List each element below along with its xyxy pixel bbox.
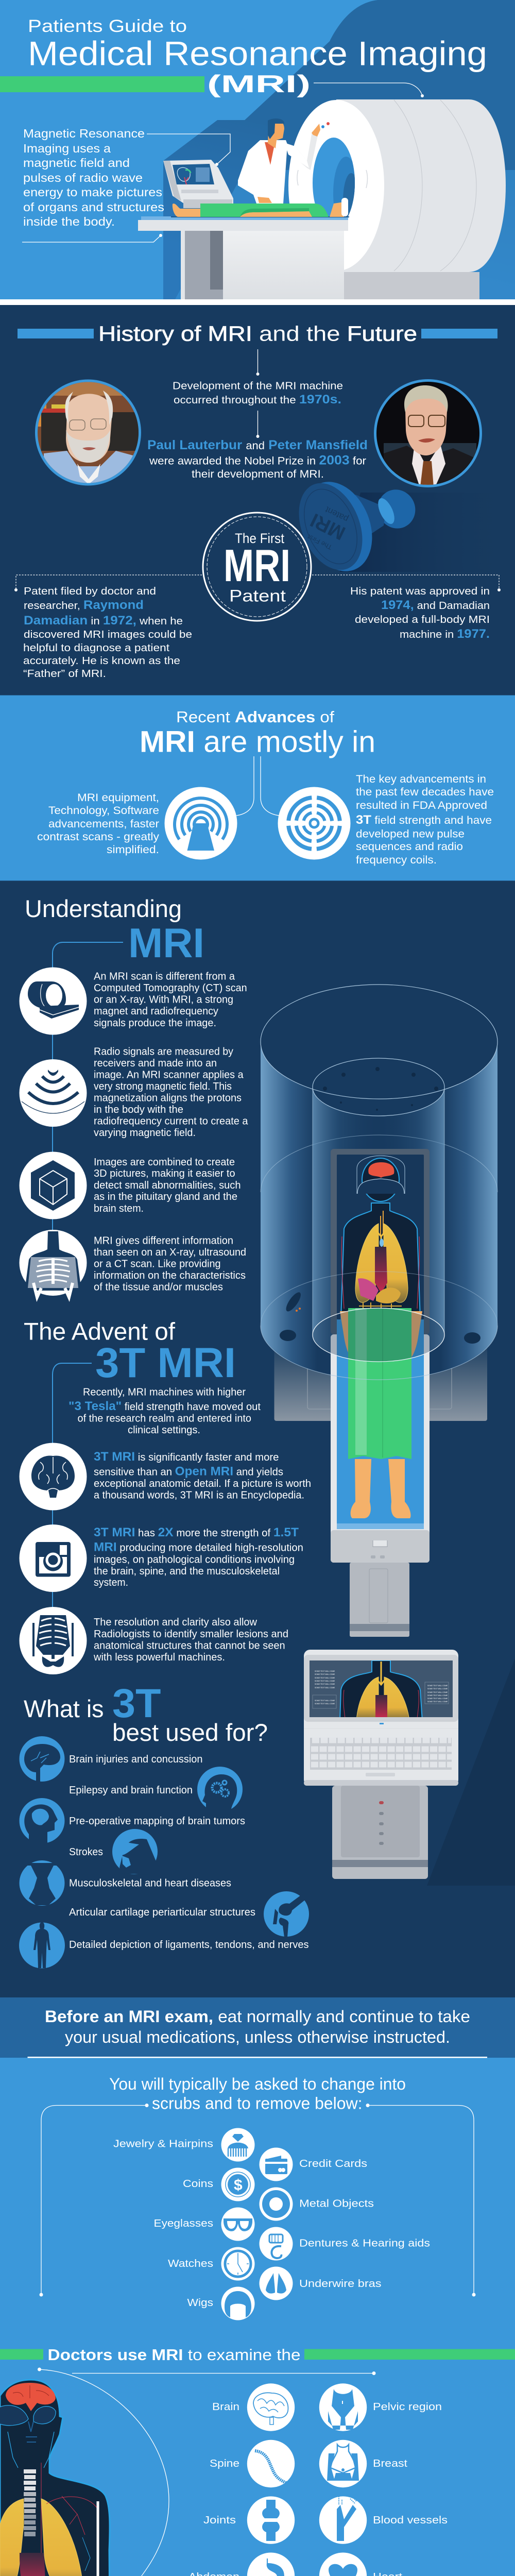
advances heading: MRI are mostly in xyxy=(140,725,375,758)
item: wigs xyxy=(187,2286,254,2320)
item: metal objects: Metal Objects xyxy=(299,2198,374,2209)
text: resolution xyxy=(93,1617,288,1663)
item: coins: Coins xyxy=(183,2178,213,2190)
understanding heading xyxy=(25,895,204,967)
text: radio signals: very strong magnetic field. This xyxy=(94,1081,232,1092)
item: jewelry and hairpins: Jewelry & Hairpins xyxy=(113,2139,213,2150)
patent filed text xyxy=(23,585,192,680)
text: 3T faster xyxy=(94,1450,311,1501)
list: strokes: Strokes xyxy=(69,1846,103,1858)
description text: of organs and structures xyxy=(23,200,164,214)
item: watches: Watches xyxy=(168,2258,213,2269)
list: brain tumors xyxy=(20,1798,245,1843)
scanner gantry base xyxy=(274,1340,487,1421)
body part: heart xyxy=(319,2552,403,2576)
panel: understanding MRI and 3T xyxy=(0,880,515,1997)
left advances text: MRI equipment, xyxy=(77,792,159,804)
text: different information: than seen on an X-ray, ultrasound xyxy=(94,1247,246,1258)
text: 3T faster: 3T MRI is significantly faster and more xyxy=(94,1450,279,1464)
text: 3D pictures xyxy=(94,1157,241,1214)
text: MRI differs from CT: An MRI scan is different from a xyxy=(94,971,235,982)
item: dentures and hearing aids xyxy=(260,2227,430,2261)
title: Medical Resonance Imaging xyxy=(28,34,487,72)
text: different information: information on the characteristics xyxy=(94,1270,246,1281)
connector arc and line xyxy=(38,2368,376,2576)
icon: MRI scanner xyxy=(20,968,87,1035)
title: Patients Guide to xyxy=(28,16,187,36)
icon: antenna xyxy=(165,787,237,859)
icon: brain xyxy=(20,1443,87,1511)
text: 3T strength: the brain, spine, and the musculoskeletal xyxy=(94,1566,280,1577)
text: resolution: anatomical structures that cannot be seen xyxy=(94,1640,285,1651)
patent dashed connectors xyxy=(14,575,501,591)
text: 3T faster: exceptional anatomic detail. If a picture is worth xyxy=(94,1478,311,1489)
callout line to console xyxy=(147,134,230,166)
illustration: MRI machine xyxy=(288,99,506,299)
photo: Paul Lauterbur xyxy=(35,379,141,487)
text: MRI differs from CT: signals produce the image. xyxy=(94,1018,216,1029)
patent approved text: developed a full-body MRI xyxy=(355,614,490,625)
nobel prize text: were awarded the Nobel Prize in 2003 for xyxy=(149,453,366,468)
body part: spine: Spine xyxy=(210,2458,239,2469)
patent filed text: Damadian in 1972, when he xyxy=(24,614,183,628)
illustration: doctor xyxy=(238,118,320,204)
patient table frame xyxy=(331,1149,430,1563)
list: musculoskeletal: Musculoskeletal and heart diseases xyxy=(69,1877,231,1889)
patent approved text: machine in 1977. xyxy=(400,627,490,641)
text: radio signals: receivers and made into an xyxy=(94,1058,217,1069)
before exam band xyxy=(0,1997,515,2058)
text: 3D pictures: brain stem. xyxy=(94,1203,144,1214)
human body anatomy xyxy=(0,2380,110,2576)
list: ligaments: Detailed depiction of ligaments, tendons, and nerves xyxy=(69,1939,309,1951)
what is 3T heading: best used for? xyxy=(112,1719,268,1746)
body part: abdomen xyxy=(188,2552,295,2576)
left advances text: simplified. xyxy=(107,844,159,856)
bracket frame xyxy=(39,2104,476,2297)
list: brain tumors: Pre-operative mapping of brain tumors xyxy=(69,1816,245,1827)
item: underwire bras: Underwire bras xyxy=(299,2278,381,2290)
description text: pulses of radio wave xyxy=(23,171,143,184)
list: strokes xyxy=(69,1829,158,1875)
change into scrubs text: scrubs and to remove below: xyxy=(152,2094,363,2113)
body part: breast xyxy=(319,2440,367,2487)
item: credit cards: Credit Cards xyxy=(299,2158,367,2170)
description text: inside the body. xyxy=(23,215,115,228)
other body parts labels right: Pelvic region xyxy=(373,2401,442,2413)
icon: target rings xyxy=(278,787,350,859)
text: radio signals: magnetization aligns the protons xyxy=(94,1093,242,1104)
body part: blood vessels xyxy=(319,2496,367,2544)
what is 3T heading: What is xyxy=(24,1695,104,1722)
item: coins xyxy=(183,2168,254,2201)
text: resolution: Radiologists to identify smaller lesions and xyxy=(94,1629,288,1640)
item: credit cards xyxy=(260,2147,367,2181)
stamp object: patent xyxy=(323,504,350,524)
nobel prize text: their development of MRI. xyxy=(192,468,324,480)
3T intro text: "3 Tesla" field strength have moved out xyxy=(68,1399,261,1413)
operator console: SOME TEXT WILL COME xyxy=(315,1683,335,1685)
doctors use MRI heading: Doctors use MRI to examine the xyxy=(47,2346,301,2364)
3T intro text: of the research realm and entered into xyxy=(77,1413,251,1425)
text: 3T strength: system. xyxy=(94,1577,128,1588)
operator console: SOME TEXT WILL COME xyxy=(315,1687,335,1689)
patent filed text: helpful to diagnose a patient xyxy=(23,642,169,654)
operator console: SOME TEXT WILL COME xyxy=(427,1701,448,1703)
description text: magnetic field and xyxy=(23,156,130,170)
timeline connector one xyxy=(256,349,260,376)
text: resolution: The resolution and clarity also allow xyxy=(94,1617,258,1628)
before exam text: your usual medications, unless otherwise instructed. xyxy=(65,2028,450,2046)
right advances text: sequences and radio xyxy=(356,841,463,853)
right advances text: 3T field strength and have xyxy=(356,813,492,827)
other body parts labels right: Blood vessels xyxy=(373,2515,448,2526)
operator console: SOME TEXT WILL COME xyxy=(315,1680,335,1682)
icon: 3D cube xyxy=(20,1152,87,1219)
white strip xyxy=(0,299,515,305)
right advances text: resulted in FDA Approved xyxy=(356,800,487,811)
text: 3T strength: MRI producing more detailed high-resolution xyxy=(94,1540,303,1554)
understanding heading: Understanding xyxy=(25,895,182,922)
stamp shadow xyxy=(340,493,515,572)
advent heading xyxy=(24,1318,236,1386)
list: musculoskeletal xyxy=(20,1860,231,1906)
text: MRI differs from CT: Computed Tomography (CT) scan xyxy=(94,982,247,994)
text: 3T strength: images, on pathological conditions involving xyxy=(94,1554,295,1566)
body part: spine xyxy=(210,2440,295,2487)
callout line to table xyxy=(22,234,162,242)
list: brain injuries xyxy=(20,1736,203,1782)
panel: before an MRI exam xyxy=(0,1997,515,2058)
advances background xyxy=(0,696,515,881)
body part: brain xyxy=(212,2383,295,2431)
patent filed text: discovered MRI images could be xyxy=(24,629,192,640)
divider xyxy=(28,2057,487,2058)
item: eyeglasses: Eyeglasses xyxy=(153,2218,213,2229)
patent filed text: Patent filed by doctor and xyxy=(24,585,156,597)
patent approved text xyxy=(350,585,490,641)
development text: Development of the MRI machine xyxy=(173,381,343,392)
stamp seal: The First xyxy=(235,531,284,546)
patent approved text: 1974, and Damadian xyxy=(381,598,490,612)
light panel background xyxy=(0,2058,515,2576)
panel: header xyxy=(0,0,515,305)
change into scrubs text: You will typically be asked to change into xyxy=(109,2075,406,2093)
operator console: SOME TEXT WILL COME xyxy=(315,1670,335,1672)
understanding heading: MRI xyxy=(128,920,204,967)
text: different information: MRI gives different information xyxy=(94,1235,233,1246)
stamp seal: Patent xyxy=(229,587,286,605)
decorative shade xyxy=(427,1658,515,1886)
operator console: SOME TEXT WILL COME xyxy=(315,1703,335,1705)
description text: energy to make pictures xyxy=(23,185,162,199)
description text: Imaging uses a xyxy=(23,142,111,155)
left advances text: advancements, faster xyxy=(48,818,159,830)
translucent lower rings xyxy=(261,1272,497,1380)
item: coins: $ xyxy=(234,2177,243,2194)
list: articular cartilage xyxy=(69,1891,309,1937)
illustration: patient on table xyxy=(173,198,348,217)
left lighter area xyxy=(0,0,377,299)
connecting lines xyxy=(236,756,279,816)
list: articular cartilage: Articular cartilage periarticular structures xyxy=(69,1907,255,1918)
patent filed text: accurately. He is known as the xyxy=(23,655,180,667)
3T intro text: Recently, MRI machines with higher xyxy=(83,1387,246,1398)
text: radio signals: in the body with the xyxy=(94,1104,183,1115)
timeline line 3T xyxy=(53,1363,92,1607)
illustration: computer console xyxy=(163,160,233,208)
operator console xyxy=(304,1650,458,1879)
list: brain injuries: Brain injuries and concussion xyxy=(69,1754,203,1765)
lower right lighter area xyxy=(175,170,515,299)
text: 3T faster: sensitive than an Open MRI and yields xyxy=(94,1464,283,1479)
timeline line understanding xyxy=(53,942,123,1236)
patent approved text: His patent was approved in xyxy=(350,585,490,597)
icon: camera xyxy=(20,1524,87,1592)
table column xyxy=(350,1563,409,1637)
operator console: SOME TEXT WILL COME xyxy=(427,1685,448,1687)
text: resolution: with less powerful machines. xyxy=(93,1652,225,1663)
illustration: patient table xyxy=(138,216,349,299)
outer cylinder xyxy=(261,985,497,1380)
icon: rib cage xyxy=(20,1607,87,1674)
inner cylinder xyxy=(261,985,497,1362)
text: radio signals: image. An MRI scanner applies a xyxy=(94,1070,244,1081)
text: different information xyxy=(94,1235,246,1293)
left advances text: Technology, Software xyxy=(48,805,159,817)
text: radio signals xyxy=(94,1046,248,1139)
callout line to machine xyxy=(314,83,424,97)
title xyxy=(28,16,487,72)
right advances text xyxy=(356,773,494,866)
text: radio signals: varying magnetic field. xyxy=(94,1127,196,1139)
patent filed text: “Father” of MRI. xyxy=(23,668,106,680)
timeline connector two xyxy=(256,411,260,438)
other body parts labels right xyxy=(373,2401,448,2526)
body part: brain: Brain xyxy=(212,2401,239,2413)
heading: History of MRI and the Future xyxy=(98,321,417,345)
text: different information: or a CT scan. Like providing xyxy=(94,1258,221,1269)
list: ligaments xyxy=(19,1922,309,1968)
stamp object: MRI xyxy=(307,509,349,544)
stamp seal xyxy=(203,513,311,621)
text: radio signals: radiofrequency current to create a xyxy=(94,1116,248,1127)
development text: occurred throughout the 1970s. xyxy=(174,393,341,406)
text: MRI differs from CT: magnet and radiofrequency xyxy=(94,1006,218,1017)
panel: what to remove and body parts xyxy=(0,2057,515,2576)
operator console: SOME TEXT WILL COME xyxy=(427,1691,448,1693)
icon: chest x-ray xyxy=(20,1230,87,1297)
operator console: SOME TEXT WILL COME xyxy=(315,1677,335,1679)
right advances text: The key advancements in xyxy=(356,773,486,785)
operator console: SOME TEXT WILL COME xyxy=(427,1694,448,1697)
text: 3T strength xyxy=(94,1526,303,1588)
right advances text: the past few decades have xyxy=(356,786,494,798)
body part: joints xyxy=(203,2496,295,2544)
console side panel xyxy=(280,1290,480,1344)
text: 3D pictures: detect small abnormalities, such xyxy=(94,1180,241,1191)
panel: history of MRI xyxy=(14,326,501,677)
3T intro text xyxy=(68,1387,261,1436)
text: 3D pictures: as in the pituitary gland and the xyxy=(94,1191,237,1202)
other body parts labels right: Breast xyxy=(373,2458,408,2469)
text: different information: of the tissue and/or muscles xyxy=(94,1282,223,1293)
left advances text: contrast scans - greatly xyxy=(37,831,160,843)
item: dentures and hearing aids: Dentures & Hearing aids xyxy=(299,2238,430,2249)
item: wigs: Wigs xyxy=(187,2297,213,2309)
panel: recent advances xyxy=(0,696,515,881)
development text xyxy=(173,381,343,406)
operator console: SOME TEXT WILL COME xyxy=(315,1700,335,1702)
stamp object: The First xyxy=(306,533,333,551)
operator console: SOME TEXT WILL COME xyxy=(427,1698,448,1700)
text: radio signals: Radio signals are measured by xyxy=(94,1046,233,1057)
before exam text: Before an MRI exam, eat normally and continue to take xyxy=(45,2007,470,2026)
header dark diagonal shape xyxy=(163,0,515,299)
illustration: top view of MRI scanner with patient xyxy=(261,985,497,1879)
operator console: SOME TEXT WILL COME xyxy=(315,1673,335,1675)
what is 3T heading xyxy=(24,1680,268,1746)
body anatomy xyxy=(341,1156,420,1319)
patient gown and limbs xyxy=(340,1308,422,1518)
body part: pelvic region xyxy=(319,2383,367,2431)
understanding background xyxy=(0,880,515,1997)
item: watches xyxy=(168,2247,254,2280)
item: metal objects xyxy=(260,2188,374,2221)
text: MRI differs from CT xyxy=(94,971,247,1029)
body part: joints: Joints xyxy=(203,2515,236,2526)
nobel prize text: Paul Lauterbur and Peter Mansfield xyxy=(147,438,368,452)
history background xyxy=(0,305,515,696)
left advances text xyxy=(37,792,160,856)
item: jewelry and hairpins xyxy=(113,2128,254,2162)
text: MRI differs from CT: or an X-ray. With MRI, a strong xyxy=(94,994,233,1006)
text: 3D pictures: Images are combined to create xyxy=(94,1157,235,1168)
right advances text: frequency coils. xyxy=(356,854,437,866)
item: underwire bras xyxy=(260,2267,381,2300)
advent heading: The Advent of xyxy=(24,1318,176,1345)
heading bars xyxy=(18,329,497,338)
item: eyeglasses xyxy=(153,2207,254,2241)
text: 3T strength: 3T MRI has 2X more the strength of 1.5T xyxy=(94,1526,299,1539)
doctors use MRI heading bars xyxy=(0,2349,515,2360)
right advances text: developed new pulse xyxy=(356,828,465,840)
advances heading: Recent Advances of xyxy=(176,708,334,726)
icon: radio signal xyxy=(20,1059,87,1127)
text: 3D pictures: 3D pictures, making it easier to xyxy=(94,1168,235,1179)
3T intro text: clinical settings. xyxy=(128,1425,200,1436)
list: epilepsy xyxy=(69,1767,243,1812)
stamp seal: MRI xyxy=(224,540,290,591)
patent filed text: researcher, Raymond xyxy=(24,598,144,612)
list: epilepsy: Epilepsy and brain function xyxy=(69,1785,193,1796)
header background xyxy=(0,0,515,299)
nobel prize text xyxy=(147,438,368,480)
stamp object xyxy=(287,471,422,582)
green bar xyxy=(0,76,204,92)
photo: Peter Mansfield xyxy=(373,379,482,487)
operator console: SOME TEXT WILL COME xyxy=(427,1688,448,1690)
text: 3T faster: a thousand words, 3T MRI is an Encyclopedia. xyxy=(94,1490,304,1501)
title MRI: (MRI) xyxy=(207,70,311,97)
advent heading: 3T MRI xyxy=(95,1340,236,1386)
what is 3T heading: 3T xyxy=(112,1680,161,1726)
before exam text xyxy=(45,2007,470,2046)
description text: Magnetic Resonance xyxy=(23,127,145,140)
description text xyxy=(23,127,164,228)
change into scrubs text xyxy=(109,2075,406,2113)
advances heading xyxy=(140,708,375,758)
